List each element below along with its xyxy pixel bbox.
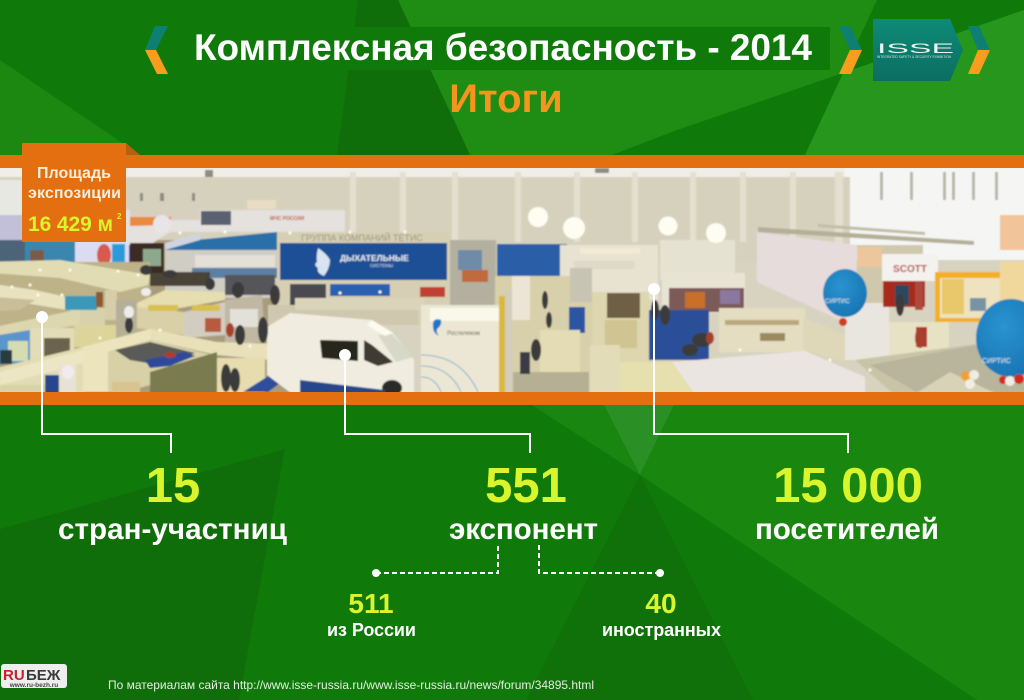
- connector: dashed to foreign: [539, 545, 664, 577]
- stat: from Russia: 511: [348, 588, 394, 619]
- blue balloons: [823, 269, 867, 317]
- logo: Rubezh: [1, 664, 67, 689]
- stat: foreign: 40: [645, 588, 677, 619]
- stat: countries: 15: [146, 459, 200, 513]
- white light balloons: [528, 207, 548, 227]
- people: [125, 265, 904, 392]
- photo: exhibition hall: СИРТИС: [825, 299, 850, 305]
- lamps: [10, 230, 872, 372]
- logo: ISSE: [873, 19, 963, 81]
- connector: countries: [36, 311, 171, 453]
- orange band top: [0, 155, 1024, 168]
- connector: visitors: [648, 283, 848, 453]
- icon: left chevron: [145, 26, 168, 74]
- icon: right chevron: [839, 26, 862, 74]
- logo: ISSE: INTEGRATED SAFETY & SECURITY EXHIBITION: [877, 55, 951, 59]
- van: [267, 313, 414, 400]
- photo: exhibition hall: ГРУППА КОМПАНИЙ ТЕТИС: [301, 232, 423, 243]
- stat: exhibitors: 551: [485, 459, 567, 513]
- stat: from Russia: из России: [327, 620, 416, 640]
- stat: exhibitors: [449, 459, 598, 546]
- stat: foreign: [602, 588, 721, 640]
- photo: exhibition hall: СИРТИС: [982, 358, 1011, 365]
- callout: exhibition area: 16 429 м: [28, 213, 113, 236]
- stat: foreign: иностранных: [602, 620, 721, 640]
- logo: Rubezh: RU: [3, 667, 25, 684]
- stat: visitors: посетителей: [755, 513, 939, 546]
- icon: far right chevron: [968, 26, 990, 74]
- source note: По материалам сайта http://www.isse-russia.ru/www.isse-russia.ru/news/forum/34895.html: [108, 678, 594, 692]
- stat: visitors: [755, 459, 939, 546]
- photo: exhibition hall: МЧС РОССИИ: [270, 216, 305, 222]
- logo: Rubezh: www.ru-bezh.ru: [9, 682, 58, 689]
- stat: countries: [58, 459, 287, 546]
- photo: exhibition hall: SCOTT: [893, 264, 927, 275]
- near left booths: [0, 347, 85, 392]
- photo: exhibition hall: [0, 160, 1024, 400]
- orange band bottom: [0, 392, 1024, 405]
- stat: visitors: 15 000: [773, 459, 923, 513]
- stat: exhibitors: экспонент: [449, 513, 598, 546]
- subtitle: Итоги: [449, 77, 563, 121]
- left floor backdrop: [0, 240, 290, 392]
- white roof: [672, 350, 866, 392]
- Sprut booth: [137, 290, 225, 310]
- right of Tetis: [450, 240, 496, 305]
- stat: from Russia: [327, 588, 416, 640]
- Tetis stand: [277, 232, 450, 324]
- connector: exhibitors: [339, 349, 530, 453]
- rostelecom: [421, 305, 499, 400]
- callout: exhibition area: экспозиции: [28, 185, 121, 202]
- logo: ISSE: ISSE: [877, 40, 954, 56]
- callout: exhibition area: Площадь: [37, 165, 111, 182]
- photo: exhibition hall: ДЫХАТЕЛЬНЫЕ: [340, 253, 409, 263]
- photo: exhibition hall: Ростелеком: [447, 331, 480, 337]
- stands row: [495, 276, 592, 392]
- left booths: roofs and walls: [0, 262, 150, 352]
- callout: exhibition area: 2: [117, 212, 122, 221]
- connector: dashed to Russia: [372, 545, 498, 577]
- photo: exhibition hall: СИСТЕМЫ: [370, 263, 393, 268]
- right stands: [938, 272, 1024, 322]
- title band: Комплексная безопасность - 2014: [194, 27, 812, 68]
- stat: countries: стран-участниц: [58, 513, 287, 546]
- logo: Rubezh: БЕЖ: [26, 667, 61, 684]
- callout: exhibition area: [22, 143, 140, 242]
